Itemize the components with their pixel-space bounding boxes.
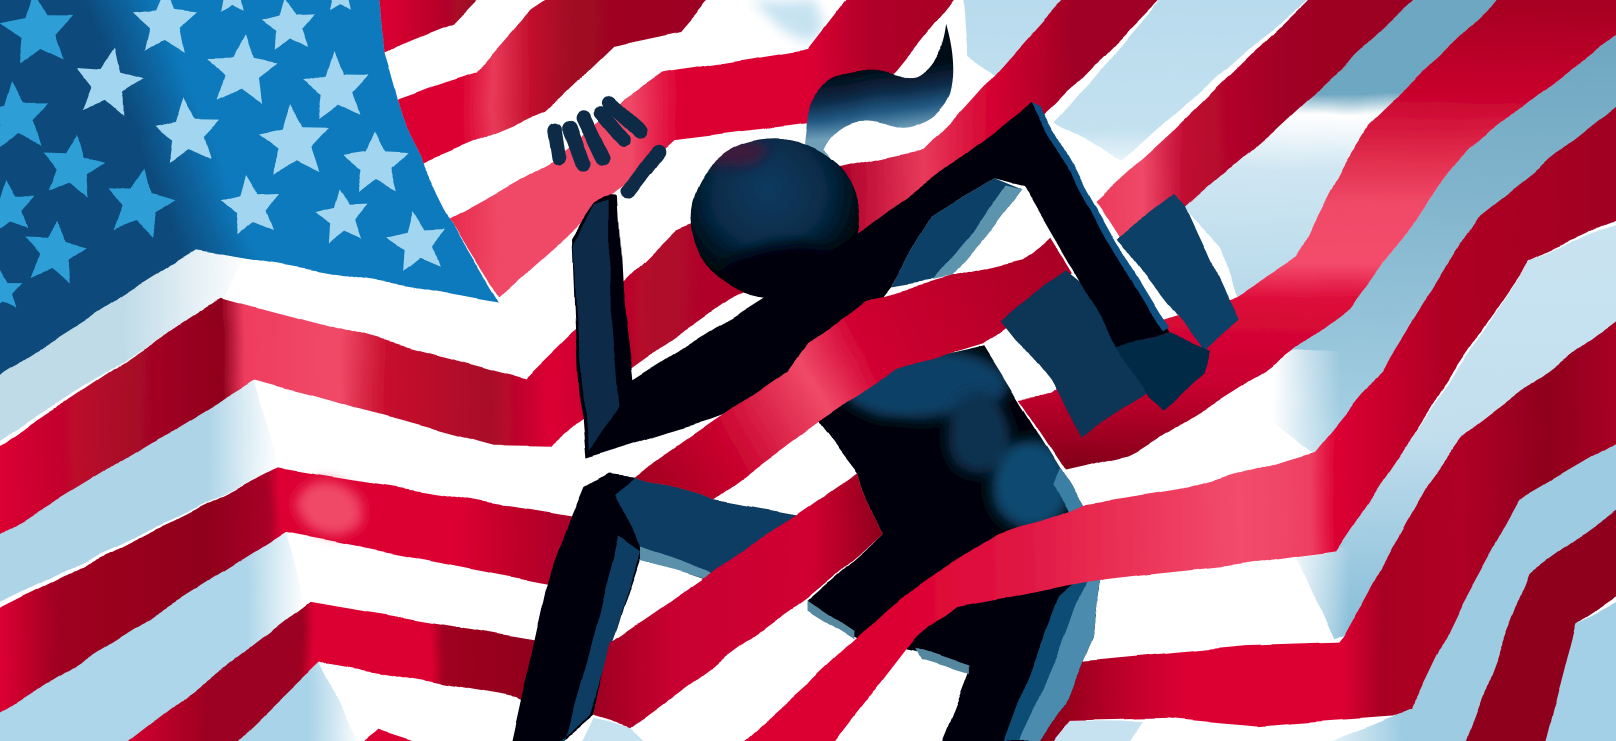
under-thigh highlight — [916, 647, 970, 674]
left leg — [510, 473, 799, 741]
ponytail — [804, 25, 953, 173]
book left flap — [1001, 270, 1165, 437]
thigh shading — [616, 476, 799, 577]
book right flap — [1117, 195, 1238, 350]
body shading — [835, 348, 1099, 741]
figure: running silhouette — [510, 25, 1099, 741]
inner arm shading — [890, 178, 1021, 287]
torso and right leg — [808, 345, 1099, 741]
raised arm and shoulders — [572, 103, 1067, 459]
arm blue edge — [1032, 103, 1169, 332]
upper arm holding book — [1024, 103, 1169, 346]
open book and holding hand — [890, 103, 1238, 437]
hand on book — [1117, 333, 1210, 410]
red band over the thigh — [593, 473, 882, 728]
canton with stars — [0, 0, 500, 381]
stars: light blue — [70, 0, 450, 273]
head — [691, 138, 866, 302]
long red stripe crossing the legs — [732, 99, 1616, 741]
red sash across the torso — [634, 238, 1072, 500]
forearm shading — [573, 201, 618, 451]
hand — [556, 103, 660, 192]
stars: shaded blue — [0, 0, 178, 311]
